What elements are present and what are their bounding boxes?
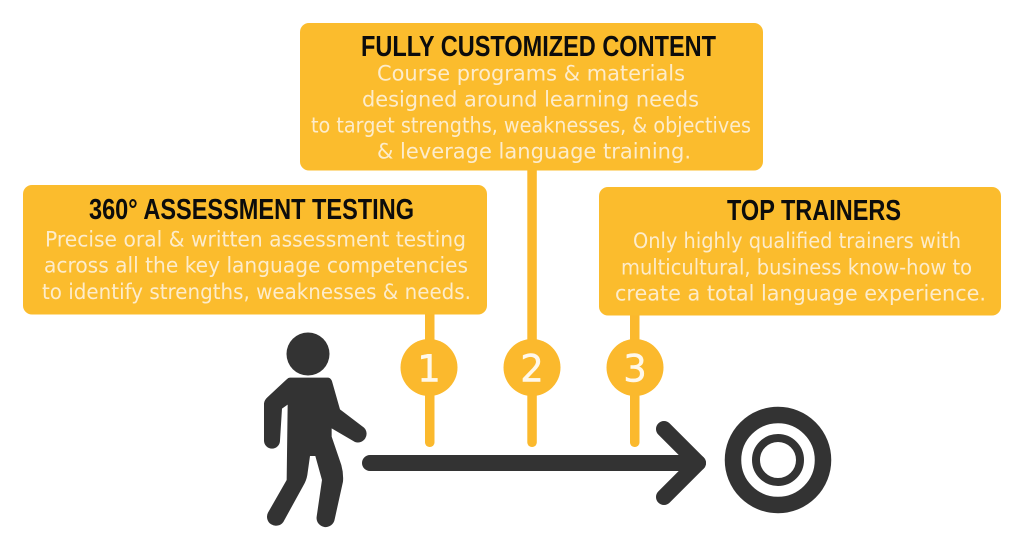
text block: trainers description: multicultural, business know-how to: [621, 256, 972, 280]
stem and badge 1: [400, 310, 458, 447]
text block: assessment description: across all the key language competencies: [44, 254, 468, 278]
panel: fully customized content: [300, 23, 763, 170]
stem and badge 2: 2: [520, 348, 544, 390]
stem and badge 1: 1: [417, 348, 441, 390]
icon: target: [733, 415, 823, 505]
text block: trainers description: Only highly qualified trainers with: [633, 229, 961, 253]
stem and badge 3: [606, 310, 664, 447]
heading: top trainers: TOP TRAINERS: [727, 195, 901, 227]
stem and badge 2: [504, 165, 560, 447]
text block: trainers description: [615, 229, 986, 306]
icon: walking person: [264, 332, 367, 527]
text block: assessment description: [42, 228, 471, 304]
text block: trainers description: create a total language experience.: [615, 282, 986, 306]
text block: assessment description: Precise oral & written assessment testing: [45, 228, 466, 252]
heading: 360 assessment testing: 360° ASSESSMENT TESTING: [89, 194, 414, 226]
text block: content description: Course programs & materials: [377, 62, 685, 86]
text block: assessment description: to identify strengths, weaknesses & needs.: [42, 280, 471, 304]
stem and badge 3: 3: [623, 348, 647, 390]
arrow: path to target: [370, 429, 698, 497]
panel: top trainers: [599, 187, 1001, 316]
panel: 360 assessment testing: [23, 185, 487, 314]
text block: content description: [311, 62, 751, 164]
text block: content description: & leverage language training.: [377, 140, 691, 164]
text block: content description: designed around learning needs: [362, 88, 699, 112]
text block: content description: to target strengths, weaknesses, & objectives: [311, 114, 751, 138]
heading: fully customized content: FULLY CUSTOMIZED CONTENT: [361, 31, 716, 63]
